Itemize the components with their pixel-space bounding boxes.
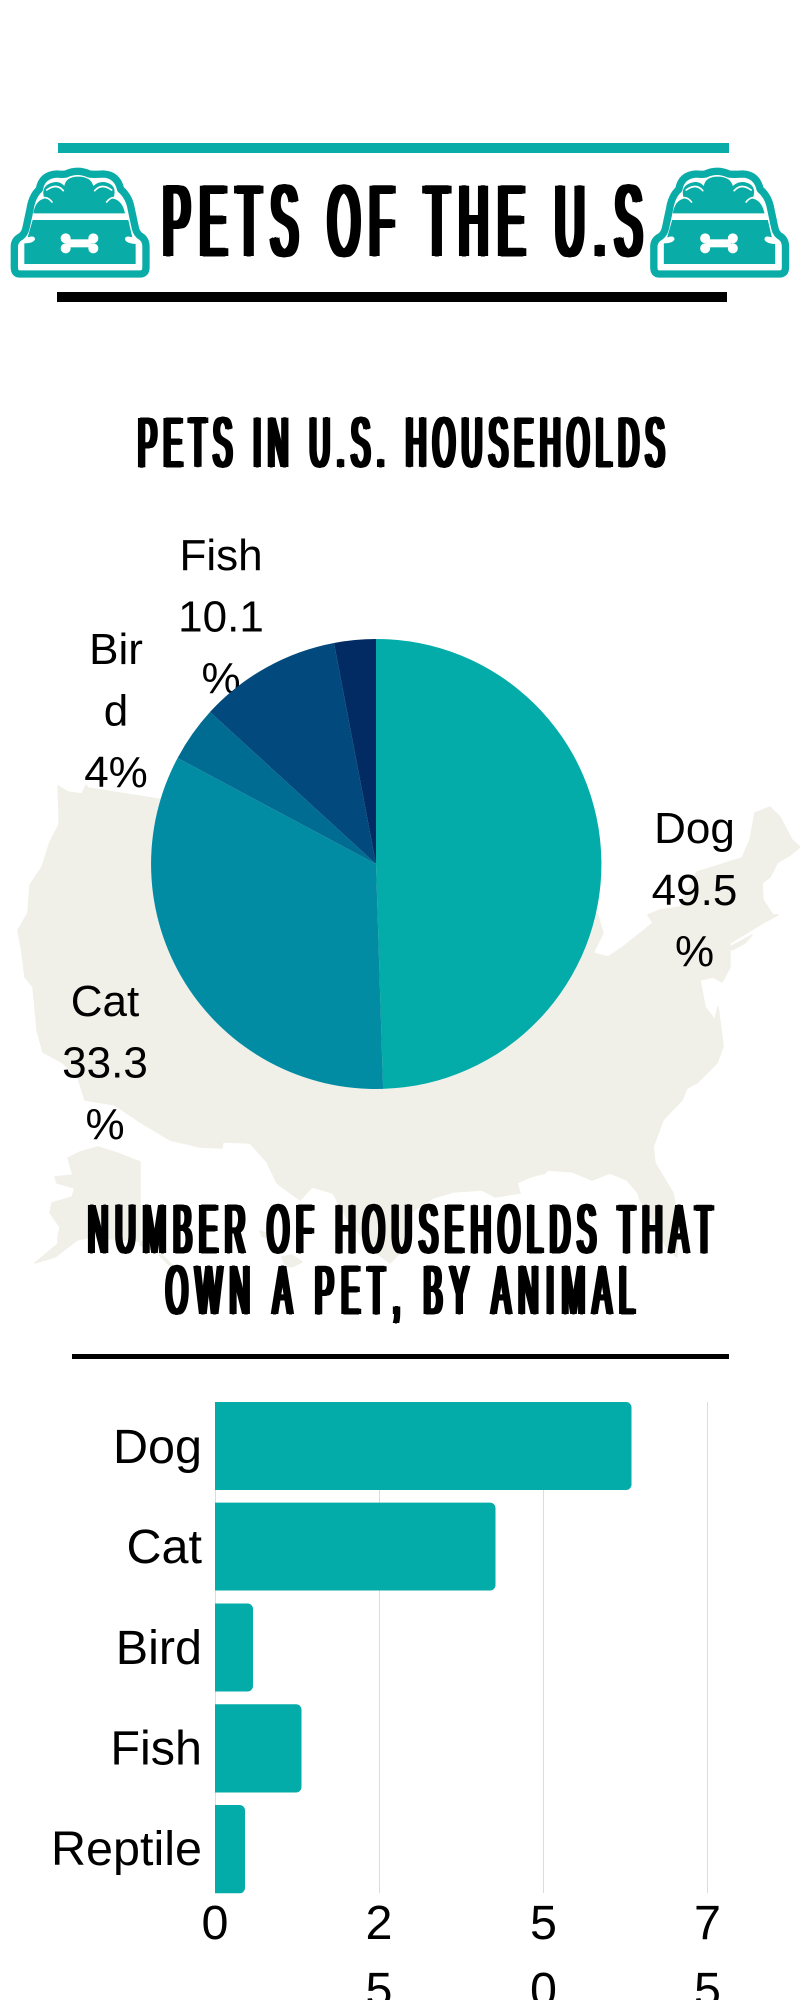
bar chart: households by animal: Reptile xyxy=(51,1822,202,1876)
bar chart: households by animal: 2 xyxy=(366,1896,392,1950)
heading: number of households, line one: NUMBER OF HOUSEHOLDS THAT xyxy=(88,1190,720,1268)
heading: number of households, line two: OWN A PET, BY ANIMAL xyxy=(166,1251,642,1329)
bar chart: households by animal: Fish xyxy=(110,1722,202,1776)
heading: pets in U.S. households: PETS IN U.S. HOUSEHOLDS xyxy=(138,404,671,483)
pie chart labels: % xyxy=(201,654,241,703)
pie chart labels: 10.1 xyxy=(178,593,264,642)
bar chart: households by animal: Bird xyxy=(116,1621,202,1675)
pie chart labels: 49.5 xyxy=(652,866,737,915)
top teal rule xyxy=(58,143,729,152)
pie chart labels: Fish xyxy=(179,531,263,580)
bar chart: households by animal: 0 xyxy=(202,1896,228,1950)
pie chart labels: Cat xyxy=(71,977,139,1026)
pie chart labels: 4% xyxy=(84,748,148,797)
pie chart labels: Bir xyxy=(89,625,143,674)
pie chart labels: Dog xyxy=(654,804,735,853)
bar chart: households by animal: 7 xyxy=(694,1896,721,1950)
icons: food bowls xyxy=(10,168,790,278)
bar chart: households by animal: Cat xyxy=(127,1520,203,1574)
pie chart labels: d xyxy=(104,687,128,736)
bottom black rule of title xyxy=(57,292,727,302)
pie chart labels: 33.3 xyxy=(62,1039,148,1088)
bar chart: households by animal: 5 xyxy=(530,1896,557,1950)
divider rule under heading xyxy=(72,1354,728,1359)
bar chart: households by animal: Dog xyxy=(113,1420,202,1474)
pie chart labels: % xyxy=(675,927,714,976)
title: PETS OF THE U.S xyxy=(163,164,651,278)
pie chart labels: % xyxy=(85,1100,125,1149)
